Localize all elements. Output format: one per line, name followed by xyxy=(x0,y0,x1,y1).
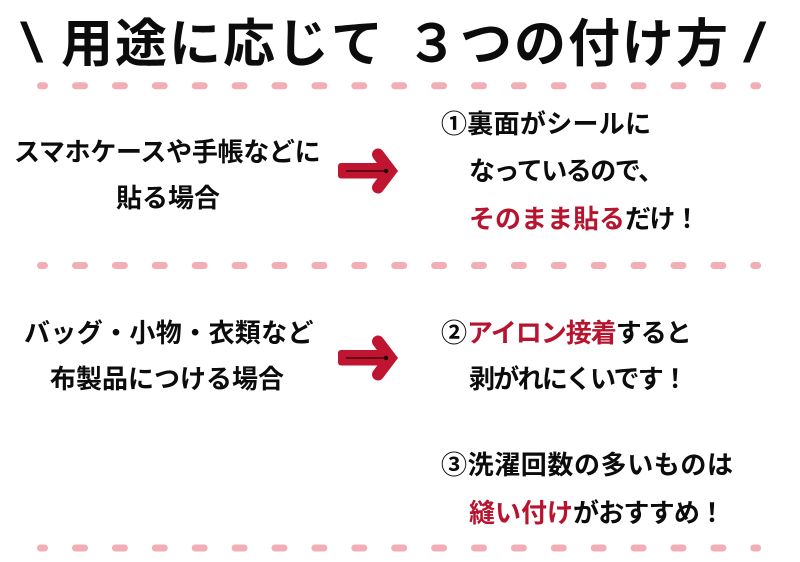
text block: fabric use: 布製品につける場合 xyxy=(50,364,284,394)
text block: fabric use xyxy=(24,318,314,394)
divider: middle xyxy=(37,262,761,269)
title xyxy=(20,11,766,74)
text block: step 2 xyxy=(441,318,691,394)
arrow: fabric xyxy=(338,336,398,380)
text block: step 1: なっているので、 xyxy=(469,156,663,186)
title: 用途に応じて xyxy=(61,16,385,74)
text block: step 3 xyxy=(441,450,734,528)
text block: phone case use: 貼る場合 xyxy=(116,183,220,213)
divider: bottom xyxy=(37,544,761,552)
title: \ xyxy=(20,11,43,74)
text block: phone case use: スマホケースや手帳などに xyxy=(14,137,320,167)
text block: step 1 xyxy=(441,109,699,234)
text block: step 3: ③洗濯回数の多いものは xyxy=(441,450,734,480)
text block: step 1: ①裏面がシールに xyxy=(441,109,651,139)
text block: step 2: 剥がれにくいです！ xyxy=(469,364,686,394)
divider: top xyxy=(37,82,762,90)
text block: step 2: ②アイロン接着すると xyxy=(441,318,691,348)
title: / xyxy=(743,11,766,74)
arrow: phone case xyxy=(338,148,398,194)
text block: step 3: 縫い付けがおすすめ！ xyxy=(469,498,724,528)
text block: phone case use xyxy=(14,137,320,213)
text block: step 1: そのまま貼るだけ！ xyxy=(469,204,699,234)
text block: fabric use: バッグ・小物・衣類など xyxy=(24,318,314,348)
title: ３つの付け方 xyxy=(406,16,730,74)
